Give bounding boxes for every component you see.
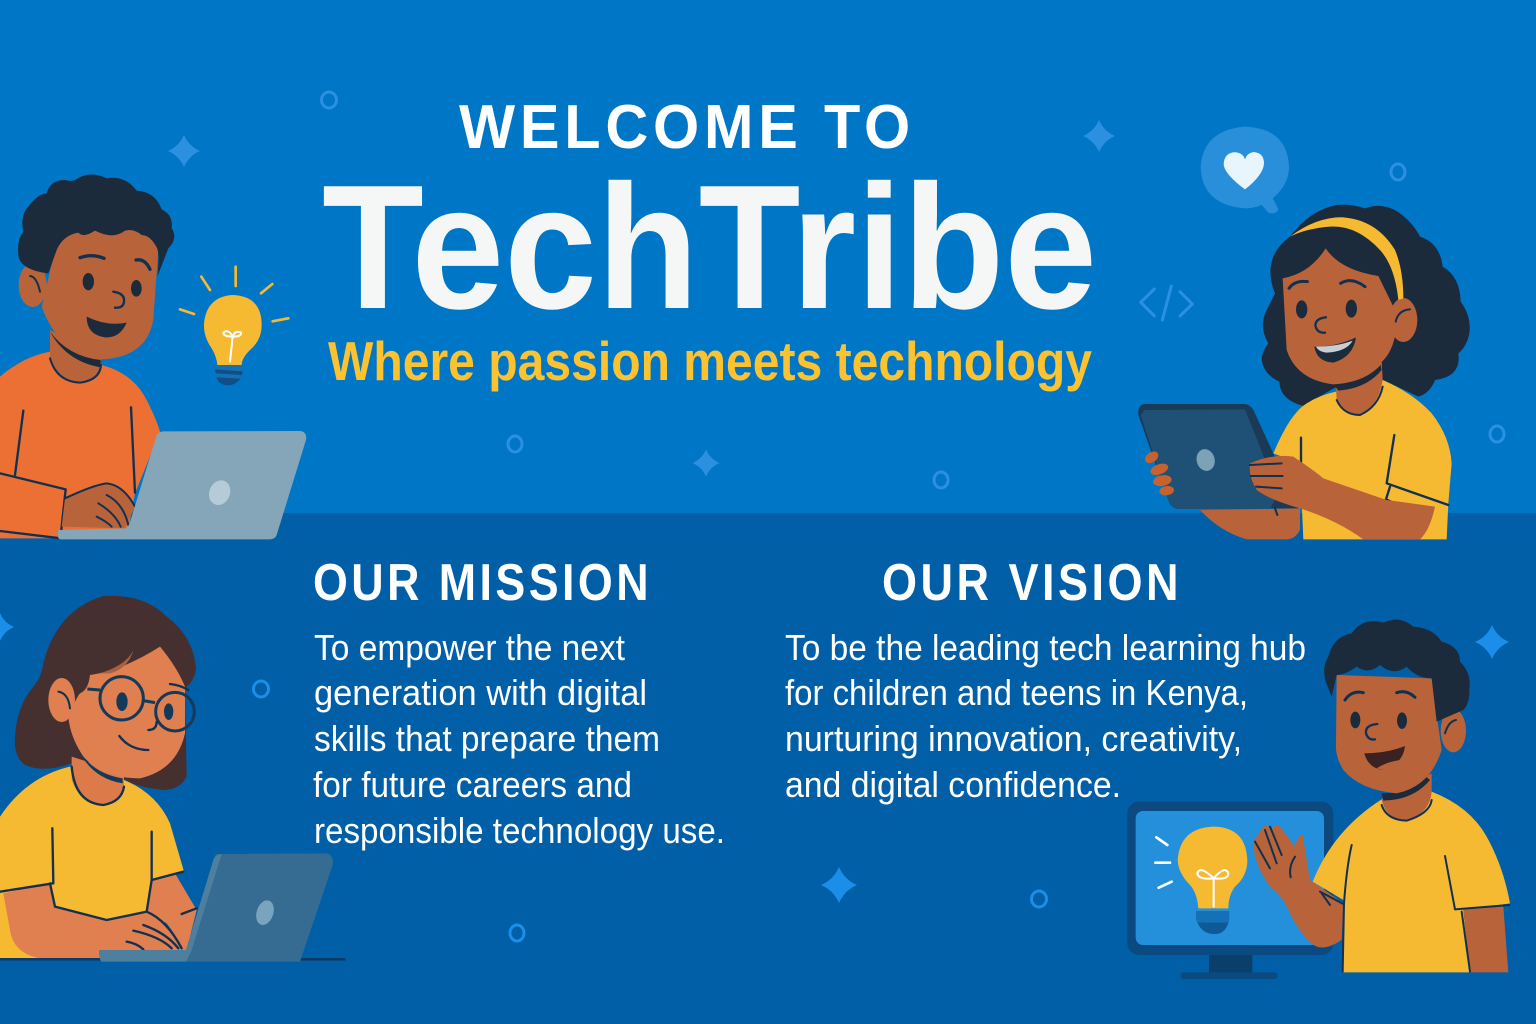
character: boy in orange shirt with laptop	[0, 175, 306, 539]
decorative sparkles and rings, lower band	[0, 613, 1509, 941]
character: girl with yellow headband and tablet	[1138, 205, 1470, 539]
text block: vision statement: nurturing innovation, creativity,	[785, 718, 1242, 759]
tagline: Where passion meets technology	[328, 330, 1092, 392]
text block: mission statement: for future careers and	[313, 764, 632, 805]
text block: vision statement	[785, 627, 1306, 805]
text block: vision statement: and digital confidence.	[785, 764, 1121, 805]
text block: mission statement: generation with digital	[314, 672, 647, 713]
title: TechTribe: TechTribe	[322, 148, 1097, 346]
heading: welcome to: WELCOME TO	[459, 93, 915, 162]
icon: speech bubble with heart	[1201, 127, 1289, 213]
text block: vision statement: To be the leading tech learning hub	[785, 627, 1306, 668]
icon: code brackets	[1141, 286, 1192, 320]
text block: mission statement	[313, 627, 725, 851]
heading: our mission: OUR MISSION	[313, 554, 652, 612]
text block: mission statement: responsible technology use.	[314, 810, 725, 851]
character: boy in yellow shirt waving	[1253, 620, 1510, 972]
text block: mission statement: skills that prepare them	[314, 718, 660, 759]
icon: light bulb with rays	[180, 267, 288, 385]
decorative sparkles and rings, upper band	[168, 92, 1504, 488]
heading: our vision: OUR VISION	[882, 554, 1182, 612]
text block: mission statement: To empower the next	[314, 627, 625, 668]
monitor with light bulb	[1127, 802, 1333, 979]
background: lower band	[0, 513, 1536, 1024]
text block: vision statement: for children and teens in Kenya,	[785, 672, 1248, 713]
background: upper band	[0, 0, 1536, 514]
character: girl with glasses and laptop	[0, 596, 345, 962]
